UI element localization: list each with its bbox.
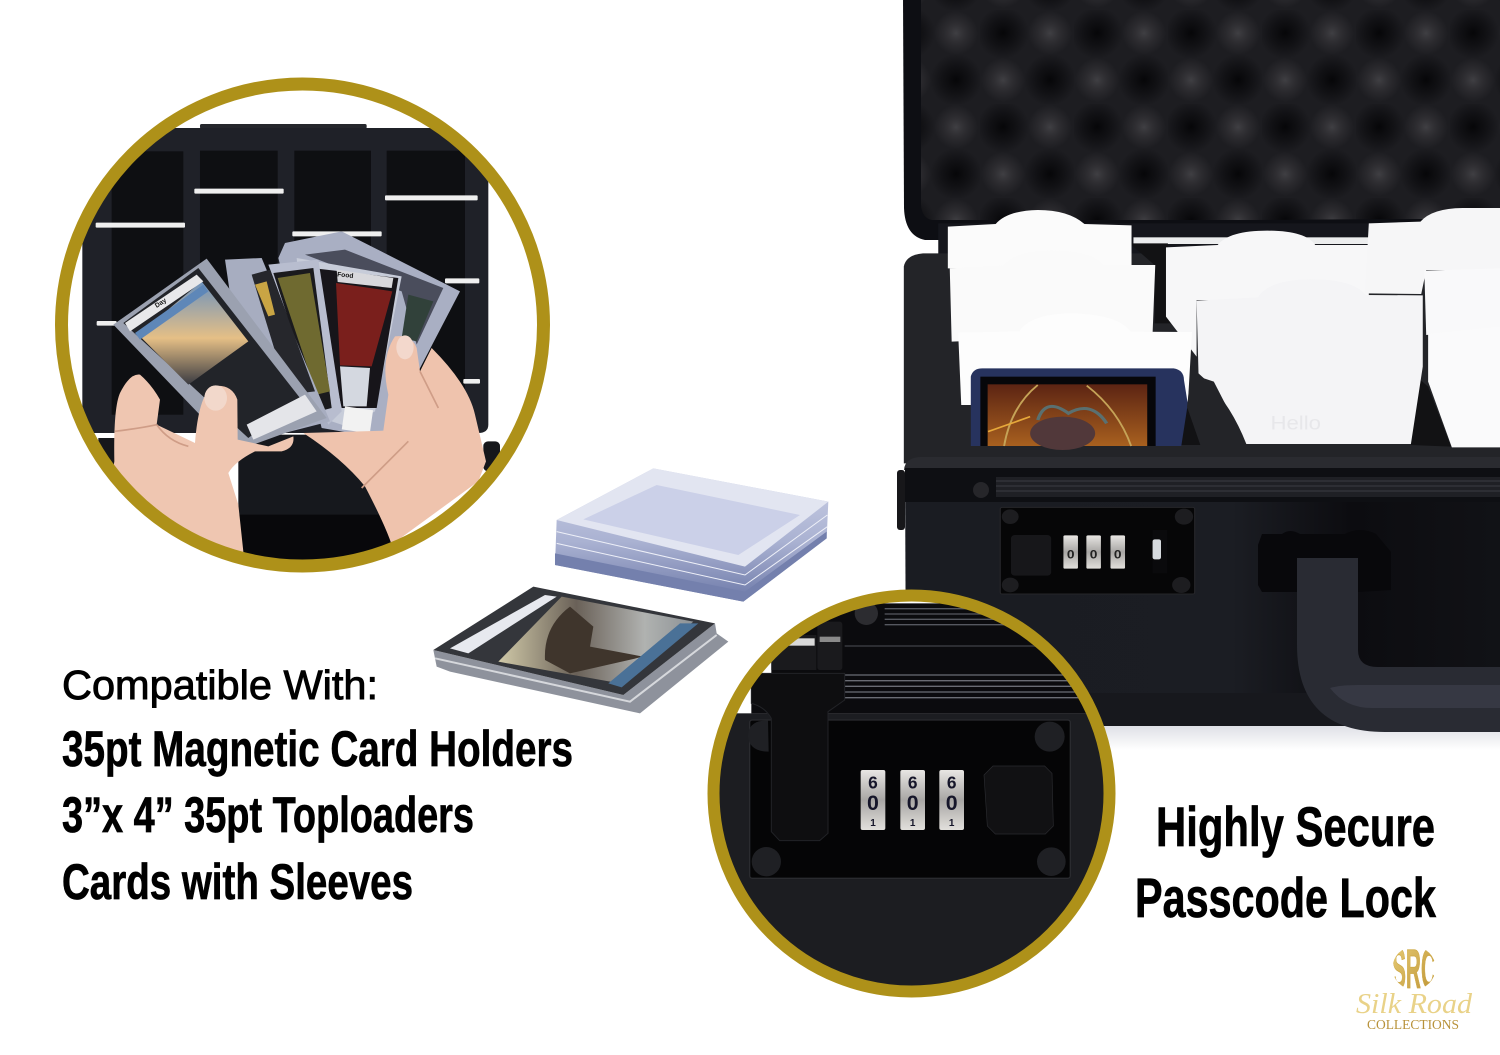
back right toploader	[278, 231, 460, 440]
handle grip	[1297, 558, 1500, 732]
embossed hello: Hello	[1270, 413, 1321, 434]
latch edge	[897, 470, 905, 530]
open lid with foam	[903, 0, 1500, 240]
text: compatibility list	[62, 662, 573, 910]
compatible with label: Compatible With:	[62, 662, 378, 708]
item: magnetic card holders: 35pt Magnetic Card Holders	[62, 721, 573, 777]
stack edges	[557, 515, 827, 585]
handle bracket	[1258, 530, 1391, 592]
divider: middle left	[950, 251, 1155, 342]
divider: front middle	[1197, 279, 1423, 444]
combination lock on case: 0	[1067, 548, 1075, 561]
brand logo	[1356, 949, 1472, 1029]
case bottom strip	[906, 693, 1500, 726]
combination lock on case: 0	[1114, 548, 1122, 561]
combination lock on case	[1000, 507, 1195, 594]
yellow card	[225, 258, 330, 441]
day card	[113, 259, 327, 451]
number wheels: 6	[908, 772, 918, 792]
circle photo: passcode lock close-up	[708, 596, 1118, 1000]
footer band	[608, 623, 698, 687]
fanned cards: Food	[337, 271, 354, 280]
center food card	[297, 258, 402, 426]
number wheels: 1	[870, 818, 876, 829]
white spacer bars	[96, 189, 480, 384]
card stack side	[433, 623, 728, 713]
number wheels: 1	[910, 818, 916, 829]
divider: right	[1424, 268, 1500, 335]
stacked toploaders	[555, 468, 828, 602]
number wheels: 0	[907, 791, 919, 815]
creature	[545, 607, 643, 673]
stacked sleeved cards	[433, 587, 728, 713]
upper rail	[751, 602, 1118, 713]
lock button	[984, 766, 1053, 834]
grip highlight	[1330, 685, 1500, 708]
foam surface	[720, 713, 1104, 986]
script name: Silk Road	[1356, 989, 1473, 1020]
top card	[433, 587, 715, 695]
upper band	[905, 468, 1500, 502]
text: secure lock heading	[1135, 795, 1437, 929]
divider: back right	[1365, 208, 1500, 294]
stack side	[555, 468, 828, 602]
case body	[905, 466, 1500, 726]
metal rim	[904, 457, 1500, 470]
tray shadow wells	[1130, 243, 1451, 447]
number wheels	[861, 770, 964, 830]
number wheels: 6	[947, 772, 957, 792]
rear rail	[938, 223, 1500, 270]
floor shadow	[1090, 726, 1500, 750]
divider: back left	[948, 210, 1132, 268]
title band	[450, 595, 557, 653]
rivets	[748, 721, 1066, 876]
divider: front right	[1428, 327, 1500, 447]
circle photo: hands holding cards	[62, 84, 544, 566]
collections: COLLECTIONS	[1367, 1018, 1459, 1033]
card art	[498, 597, 693, 683]
handle	[1258, 530, 1500, 732]
front foam rim	[1187, 374, 1246, 445]
number wheels: 6	[868, 772, 878, 792]
storage case photo	[897, 0, 1500, 750]
card in toploader	[971, 368, 1188, 450]
divider: back middle	[1166, 231, 1369, 357]
item: sleeved cards: Cards with Sleeves	[62, 854, 413, 910]
latch strap	[751, 673, 845, 841]
gold ring	[62, 84, 544, 566]
hinge	[771, 622, 842, 670]
hands	[112, 335, 486, 555]
ribbed strip	[996, 477, 1500, 497]
black case tray	[82, 124, 488, 433]
combination lock on case: 0	[1090, 548, 1097, 561]
number wheels: 0	[946, 791, 958, 815]
interior parts in zoom coordinates	[904, 208, 1500, 463]
divider: front left	[958, 313, 1192, 405]
item: toploaders: 3”x 4” 35pt Toploaders	[62, 787, 474, 843]
fanned cards: Day	[154, 297, 168, 310]
lock plate	[750, 720, 1070, 878]
rivet	[973, 482, 989, 498]
number wheels: 0	[867, 791, 879, 815]
gold ring	[714, 596, 1110, 992]
green card	[268, 260, 342, 425]
fanned cards	[113, 231, 460, 451]
number wheels: 1	[949, 818, 955, 829]
foam tray	[904, 253, 1500, 463]
top face	[557, 468, 828, 567]
case lower half	[98, 435, 500, 561]
